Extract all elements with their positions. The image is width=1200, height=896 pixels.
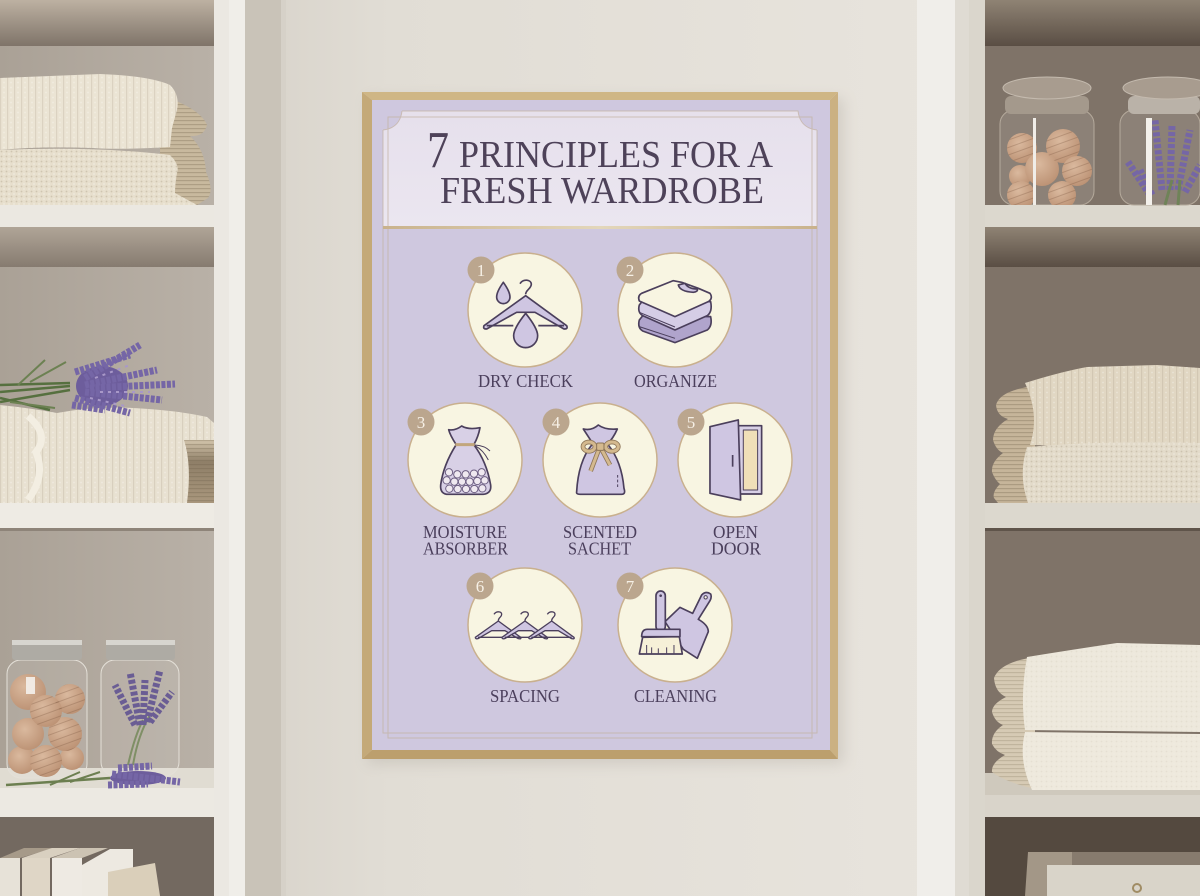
jars and wooden balls, left bottom xyxy=(6,640,180,785)
badge 6 xyxy=(466,572,494,600)
framed poster xyxy=(362,92,838,759)
label: scented sachet xyxy=(563,522,637,558)
circle 5 xyxy=(678,403,792,517)
circle 4 xyxy=(543,403,657,517)
label: scented sachet: SACHET xyxy=(568,538,631,558)
circle 7 xyxy=(618,568,732,682)
number 6: 6 xyxy=(476,577,484,596)
sweaters, right middle xyxy=(992,365,1200,503)
sweaters top left xyxy=(0,74,211,205)
icon: three hangers xyxy=(475,612,574,639)
title xyxy=(427,122,774,212)
storage box, right bottom xyxy=(1025,852,1200,896)
icon: broom and dustpan xyxy=(639,591,711,658)
item 7: cleaning xyxy=(616,568,732,706)
folded blankets, right bottom xyxy=(992,643,1200,790)
item 1: dry check xyxy=(468,253,582,391)
circle 6 xyxy=(468,568,582,682)
icon: hanger with water drops xyxy=(484,280,567,348)
item 6: spacing xyxy=(466,568,582,706)
label: moisture absorber: ABSORBER xyxy=(423,538,508,558)
header gold rule xyxy=(383,226,817,229)
label: spacing: SPACING xyxy=(490,686,560,706)
badge 3 xyxy=(408,408,434,436)
jars and wooden balls, right top xyxy=(985,77,1200,212)
icon: open door xyxy=(710,420,762,500)
label: cleaning: CLEANING xyxy=(634,686,717,706)
number 2: 2 xyxy=(626,261,634,280)
right shelving unit xyxy=(917,0,1200,896)
item 3: moisture absorber xyxy=(408,403,522,558)
poster border lines xyxy=(383,111,817,738)
header plate xyxy=(383,111,817,227)
title: PRINCIPLES FOR A xyxy=(459,134,774,176)
sweater with lavender, left middle xyxy=(0,345,214,503)
label: dry check: DRY CHECK xyxy=(478,371,573,391)
title: FRESH WARDROBE xyxy=(440,170,764,212)
icon: folded towels xyxy=(639,281,711,343)
label: moisture absorber xyxy=(423,522,508,558)
item 5: open door xyxy=(678,403,792,558)
icon: bag of beads xyxy=(441,426,491,494)
badge 7 xyxy=(616,572,644,600)
label: organize: ORGANIZE xyxy=(634,371,717,391)
label: open door xyxy=(711,522,761,558)
number 1: 1 xyxy=(477,261,485,280)
circle 2 xyxy=(618,253,732,367)
number 5: 5 xyxy=(687,413,695,432)
number 3: 3 xyxy=(417,413,425,432)
circle 3 xyxy=(408,403,522,517)
badge 1 xyxy=(468,256,494,284)
icon: sachet with bow xyxy=(577,425,625,494)
title: 7 xyxy=(427,122,449,179)
poster background xyxy=(372,100,830,750)
circle 1 xyxy=(468,253,582,367)
item 2: organize xyxy=(616,253,732,391)
label: open door: OPEN xyxy=(713,522,758,542)
badge 2 xyxy=(616,256,644,284)
label: moisture absorber: MOISTURE xyxy=(423,522,507,542)
label: open door: DOOR xyxy=(711,538,761,558)
item 4: scented sachet xyxy=(542,403,657,558)
number 7: 7 xyxy=(626,577,635,596)
books, left bottom xyxy=(0,848,160,896)
badge 5 xyxy=(678,408,704,436)
wall background xyxy=(245,0,970,896)
badge 4 xyxy=(542,408,570,436)
gold frame xyxy=(362,92,838,759)
number 4: 4 xyxy=(552,413,561,432)
poster shadow xyxy=(368,98,844,764)
left shelving unit xyxy=(0,0,286,896)
label: scented sachet: SCENTED xyxy=(563,522,637,542)
